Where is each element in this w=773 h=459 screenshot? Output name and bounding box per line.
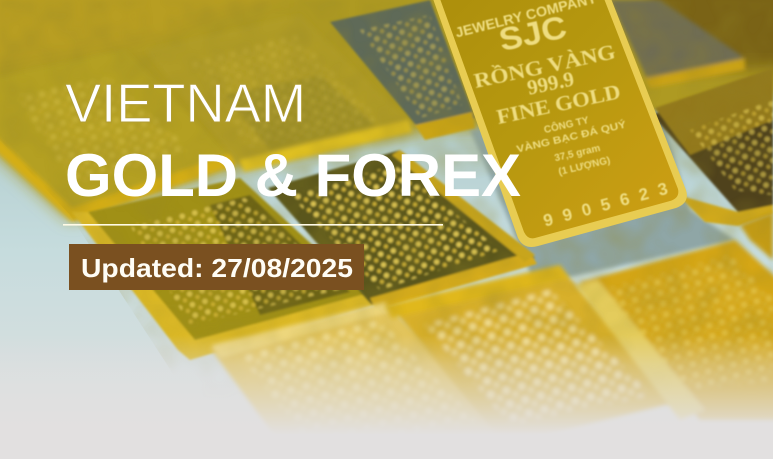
bar engraved text: FINE GOLD <box>494 79 623 129</box>
date badge <box>69 244 364 290</box>
bar engraved text: CÔNG TY <box>543 113 590 136</box>
title: GOLD & FOREX: GOLD & FOREX <box>65 142 521 209</box>
gold bar: middle dark <box>268 150 537 310</box>
gold bar: lower middle <box>210 302 520 459</box>
gold bar: lower right <box>575 212 773 420</box>
divider line <box>63 224 443 226</box>
bar body <box>432 0 687 247</box>
central SJC gold bar <box>432 0 687 247</box>
bar engraved text <box>454 0 670 230</box>
gold bar: upper middle <box>145 15 412 172</box>
bar engraved text: 37,5 gram <box>553 143 602 164</box>
bar engraved text: (1 LƯỢNG) <box>557 155 611 178</box>
title: VIETNAM: VIETNAM <box>65 72 306 134</box>
bar engraved text: 9905623 <box>541 179 670 230</box>
bar engraved text: 999.9 <box>525 67 576 100</box>
gold bar: upper left <box>0 50 236 222</box>
gold bar: upper right blurred <box>610 0 745 88</box>
photo texture: mottling <box>6 4 773 365</box>
top blurred olive background <box>0 0 773 220</box>
bar face <box>439 0 678 238</box>
bar engraved text: RỒNG VÀNG <box>472 39 617 93</box>
bottom fade overlay <box>0 335 773 435</box>
table strip behind central bar <box>470 110 735 285</box>
gold bar: upper dark blue <box>330 0 475 140</box>
gold bar: right dark <box>652 68 773 226</box>
bottom grey band <box>0 435 773 459</box>
badge text: Updated: 27/08/2025 <box>81 253 353 283</box>
badge background <box>69 244 364 290</box>
gold bar: middle left <box>72 178 378 360</box>
bar engraved text: SJC <box>496 9 570 58</box>
gold bar: lower center <box>385 265 685 445</box>
bar engraved text: VÀNG BẠC ĐÁ QUÝ <box>515 118 628 156</box>
